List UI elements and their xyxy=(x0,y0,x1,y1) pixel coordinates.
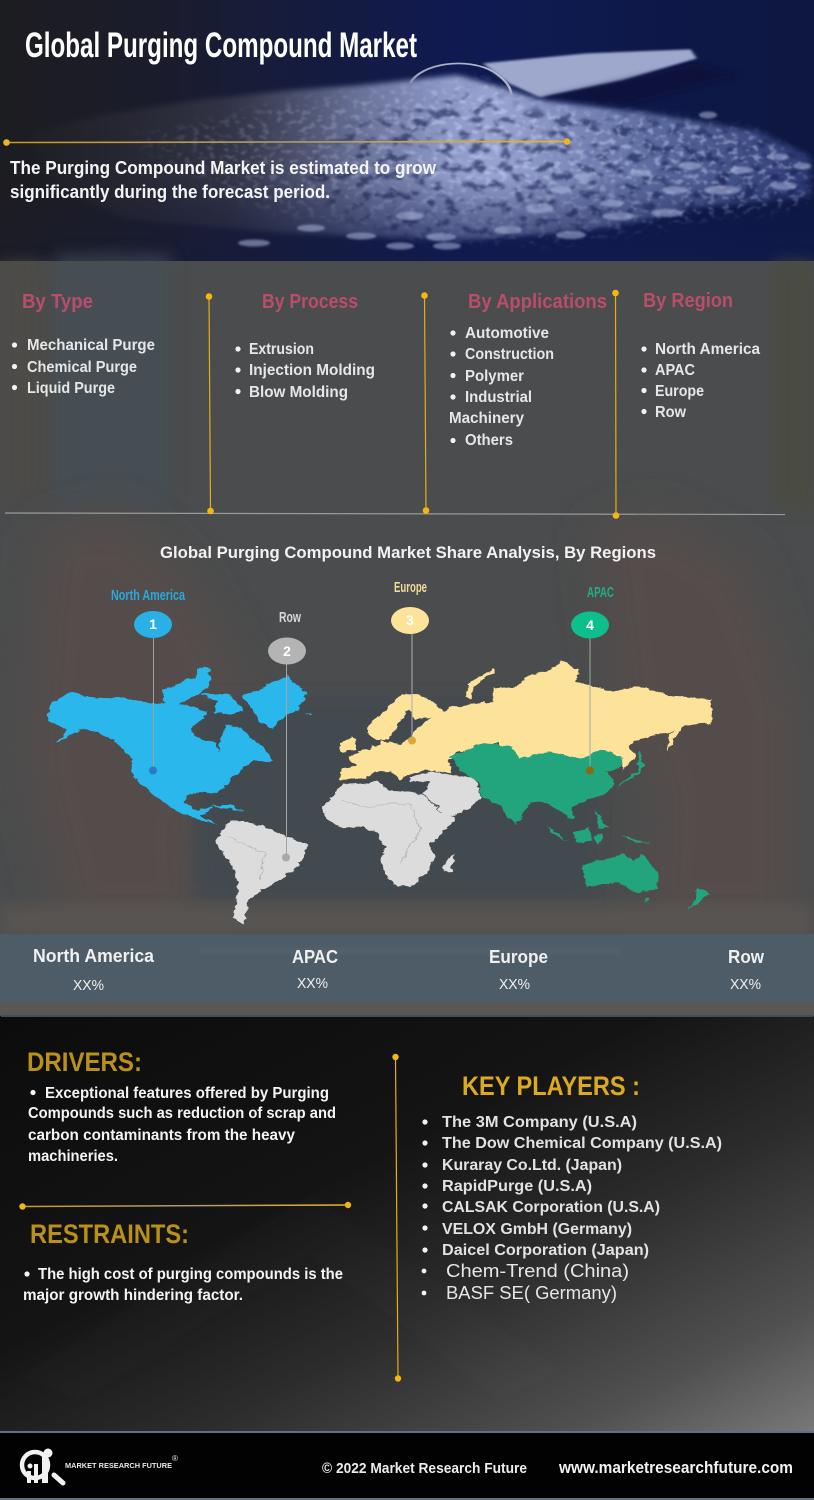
icon: magnifier with bars xyxy=(22,1448,63,1483)
column: by type: Chemical Purge xyxy=(27,359,137,376)
drivers: DRIVERS: xyxy=(27,1047,142,1077)
column: by region: Europe xyxy=(655,383,704,400)
key players: The Dow Chemical Company (U.S.A) xyxy=(442,1135,722,1152)
drivers xyxy=(27,1047,336,1165)
column: by region: By Region xyxy=(643,289,733,312)
column: by process xyxy=(235,290,375,401)
column: by region: North America xyxy=(655,341,760,358)
column: by applications: By Applications xyxy=(468,290,607,313)
column: by applications xyxy=(449,290,607,449)
key players: RapidPurge (U.S.A) xyxy=(442,1178,592,1195)
drivers: Compounds such as reduction of scrap and xyxy=(28,1105,336,1122)
column: by applications: Construction xyxy=(465,346,554,363)
column: by process: Blow Molding xyxy=(249,384,348,401)
regional share band: XX% xyxy=(730,976,761,993)
restraints xyxy=(23,1219,343,1304)
middle section background: hands and bar chart photo xyxy=(0,255,814,1016)
column: by type: Liquid Purge xyxy=(27,380,115,397)
column: by region xyxy=(641,289,760,421)
column dividers with gold dots xyxy=(5,290,785,519)
hero subtitle: The Purging Compound Market is estimated to grow xyxy=(10,158,437,178)
divider between drivers and restraints xyxy=(19,1202,351,1210)
restraints: RESTRAINTS: xyxy=(30,1219,189,1249)
pin 3: europe xyxy=(391,607,429,634)
regional share band: Row xyxy=(728,947,765,967)
key players: Daicel Corporation (Japan) xyxy=(442,1242,649,1259)
column: by process: Injection Molding xyxy=(249,362,375,379)
column: by type: By Type xyxy=(22,290,93,313)
key players: The 3M Company (U.S.A) xyxy=(442,1114,637,1131)
drivers: Exceptional features offered by Purging xyxy=(45,1085,329,1102)
footer bar xyxy=(0,1431,814,1500)
key players xyxy=(422,1071,722,1303)
regional share band: APAC xyxy=(292,947,338,967)
footer copyright: © 2022 Market Research Future xyxy=(322,1460,527,1477)
map pins xyxy=(134,607,609,862)
column: by applications: Machinery xyxy=(449,410,524,427)
world map xyxy=(47,661,712,924)
map labels: APAC xyxy=(587,584,614,601)
column: by type xyxy=(12,290,155,397)
regional share band xyxy=(0,934,814,1003)
drivers: carbon contaminants from the heavy xyxy=(28,1127,295,1144)
map labels xyxy=(111,579,614,626)
column: by region: APAC xyxy=(655,362,695,379)
key players: BASF SE( Germany) xyxy=(446,1283,617,1303)
bottom section background xyxy=(0,1015,814,1431)
map: africa and middle east xyxy=(322,772,480,887)
footer logo: MARKET RESEARCH FUTURE xyxy=(65,1463,172,1470)
hero divider with gold dots xyxy=(3,138,570,146)
pin 4: apac: 4 xyxy=(586,617,594,633)
regional share band: XX% xyxy=(297,975,328,992)
map labels: North America xyxy=(111,587,185,604)
footer logo xyxy=(22,1448,178,1483)
column: by applications: Polymer xyxy=(465,368,524,385)
column: by process: By Process xyxy=(262,290,358,313)
key players: VELOX GmbH (Germany) xyxy=(442,1221,632,1238)
hero title: Global Purging Compound Market xyxy=(25,26,417,65)
column: by applications: Others xyxy=(465,432,513,449)
map: north america xyxy=(47,667,313,825)
map section heading: Global Purging Compound Market Share Analysis, By Regions xyxy=(160,543,656,562)
key players: CALSAK Corporation (U.S.A) xyxy=(442,1199,660,1216)
map: south america xyxy=(215,820,307,924)
pin 2: row: 2 xyxy=(283,643,291,659)
pin 4: apac xyxy=(571,612,609,638)
restraints: The high cost of purging compounds is the xyxy=(38,1266,343,1283)
column: by applications: Industrial xyxy=(465,389,532,406)
hero subtitle: significantly during the forecast period. xyxy=(10,182,330,202)
regional share band: XX% xyxy=(73,977,104,994)
column: by applications: Automotive xyxy=(465,325,549,342)
column: by region: Row xyxy=(655,404,687,421)
key players: Kuraray Co.Ltd. (Japan) xyxy=(442,1157,622,1174)
regional share band: North America xyxy=(33,946,155,966)
map labels: Europe xyxy=(394,579,427,596)
map labels: Row xyxy=(279,609,301,626)
pin 2: row xyxy=(268,638,306,664)
hero subtitle xyxy=(10,158,437,202)
hero background photo xyxy=(0,0,814,261)
footer website: www.marketresearchfuture.com xyxy=(558,1459,793,1477)
key players: KEY PLAYERS : xyxy=(462,1071,640,1101)
map: asia pacific xyxy=(449,743,709,909)
drivers: machineries. xyxy=(28,1148,118,1165)
vertical divider xyxy=(392,1054,401,1382)
footer logo: ® xyxy=(172,1454,178,1463)
key players: Chem-Trend (China) xyxy=(446,1261,629,1281)
pin 3: europe: 3 xyxy=(406,612,414,628)
map: europe and russia xyxy=(340,661,712,780)
regional share band: XX% xyxy=(499,976,530,993)
restraints: major growth hindering factor. xyxy=(23,1287,243,1304)
pin 1: north america xyxy=(134,611,172,638)
column: by process: Extrusion xyxy=(249,341,314,358)
column: by type: Mechanical Purge xyxy=(27,337,155,354)
pin 1: north america: 1 xyxy=(149,616,157,632)
regional share band: Europe xyxy=(489,947,548,967)
